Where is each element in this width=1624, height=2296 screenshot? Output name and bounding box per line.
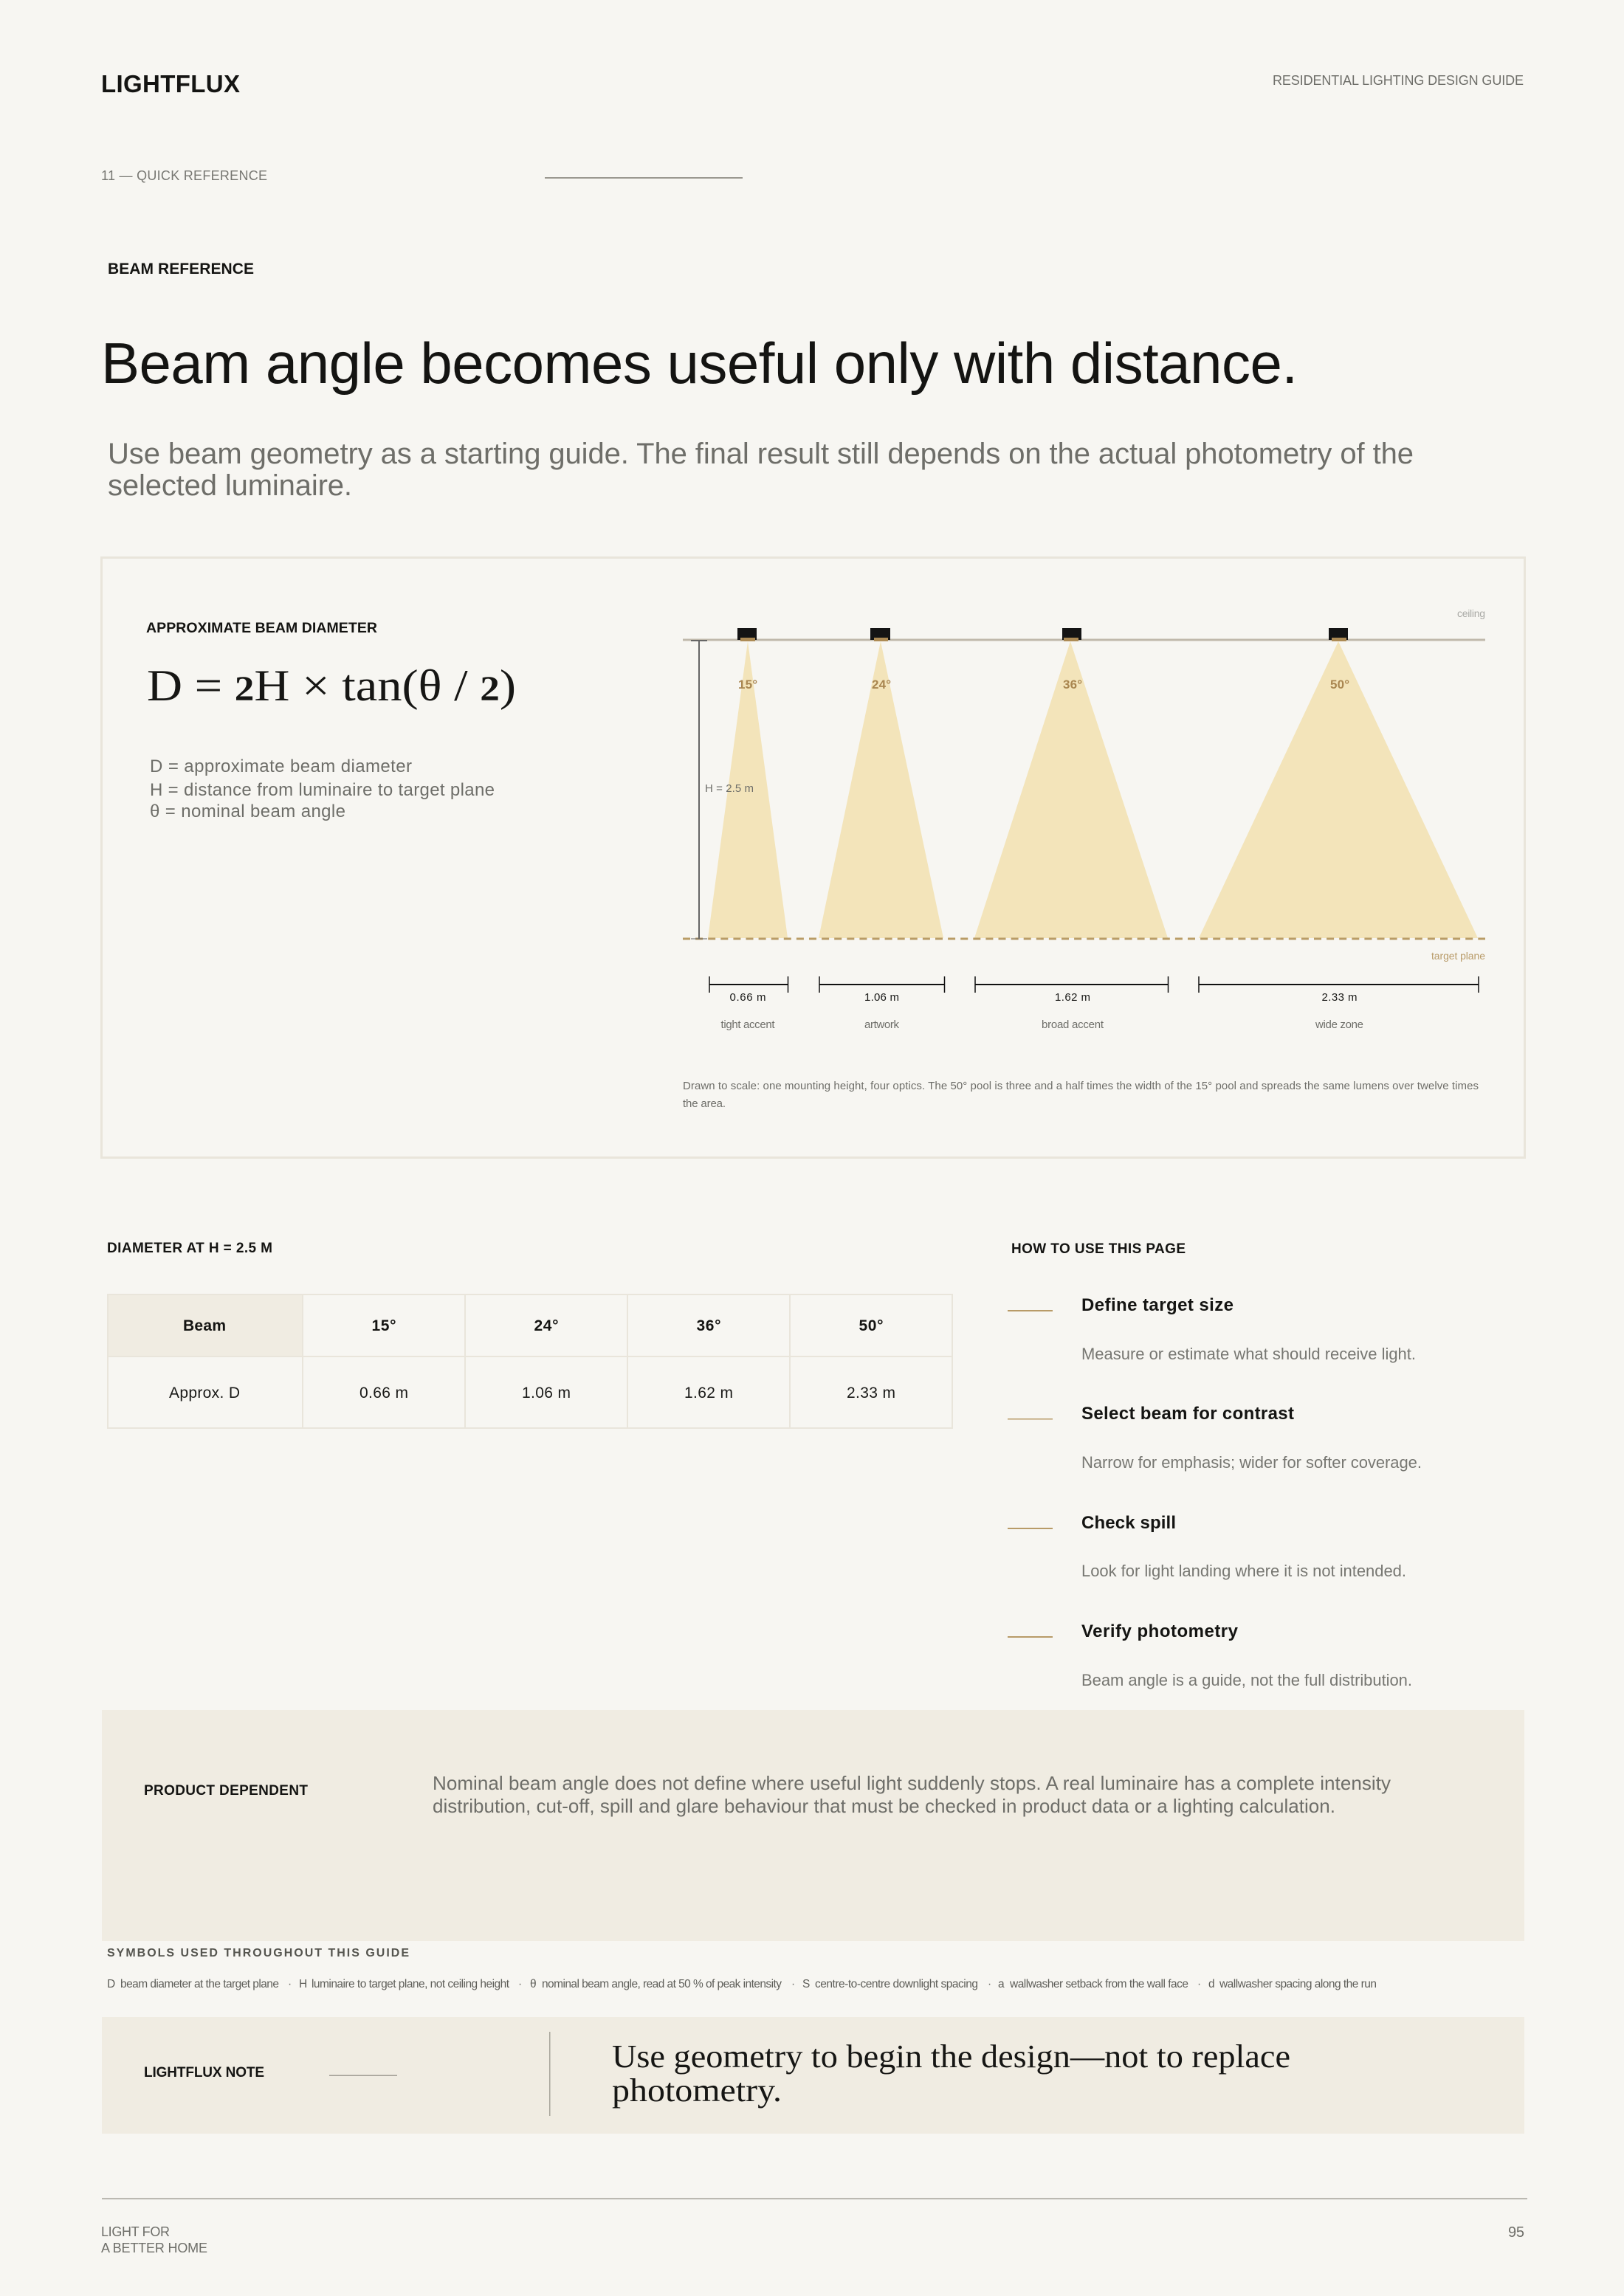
callout body: distribution, cut-off, spill and glare behaviour that must be checked in product data or a lighting calculation.: [433, 1795, 1335, 1817]
symbols list: ·: [1197, 1978, 1201, 1990]
table header row: [183, 1317, 883, 1334]
steps heading: HOW TO USE THIS PAGE: [1011, 1241, 1186, 1257]
table heading: DIAMETER AT H = 2.5 M: [107, 1241, 272, 1256]
step 4: Beam angle is a guide, not the full distribution.: [1081, 1671, 1412, 1689]
subtitle: Use beam geometry as a starting guide. The final result still depends on the actual photometry of the: [108, 438, 1414, 470]
table header row: 36°: [697, 1317, 720, 1334]
use labels: broad accent: [1042, 1018, 1104, 1031]
eyebrow: BEAM REFERENCE: [108, 261, 254, 277]
table header row: 50°: [859, 1317, 883, 1334]
beam angle labels: 36°: [1063, 678, 1082, 692]
footer tagline: LIGHT FOR: [101, 2224, 170, 2239]
table value row: 2.33 m: [847, 1385, 895, 1402]
symbols list: luminaire to target plane, not ceiling height: [312, 1978, 510, 1990]
symbols list: ·: [791, 1978, 795, 1990]
step 2: [1008, 1404, 1422, 1472]
table grid: [108, 1294, 952, 1428]
width values: [729, 991, 1357, 1004]
use labels: tight accent: [720, 1018, 775, 1031]
symbols list: [107, 1978, 1377, 1990]
table value row: 1.62 m: [684, 1385, 733, 1402]
panel: beam diameter formula and diagram: [102, 558, 1525, 1157]
step 2: Select beam for contrast: [1081, 1404, 1294, 1424]
step 2: Narrow for emphasis; wider for softer coverage.: [1081, 1453, 1422, 1472]
panel: how to use this page: [1008, 1241, 1422, 1689]
symbols list: wallwasher setback from the wall face: [1009, 1978, 1188, 1990]
symbols list: θ: [530, 1978, 537, 1990]
table value row: Approx. D: [169, 1385, 240, 1402]
step 4: Verify photometry: [1081, 1621, 1239, 1641]
ceiling label: ceiling: [1457, 607, 1485, 619]
title: Beam angle becomes useful only with distance.: [101, 331, 1298, 396]
table header cell background: [108, 1294, 303, 1356]
formula legend: H = distance from luminaire to target plane: [150, 780, 495, 800]
diagram caption: Drawn to scale: one mounting height, four optics. The 50° pool is three and a half times the width of the 15° pool and spreads the same lumens over twelve times: [683, 1080, 1479, 1092]
table header row: Beam: [183, 1317, 226, 1334]
width values: 1.06 m: [864, 991, 899, 1004]
note quote: photometry.: [612, 2072, 782, 2109]
symbols list: ·: [988, 1978, 991, 1990]
table value row: 1.06 m: [522, 1385, 571, 1402]
note quote: [612, 2038, 1290, 2109]
footer tagline: [101, 2224, 207, 2255]
height dimension: H = 2.5 m: [705, 782, 754, 795]
formula legend: D = approximate beam diameter: [150, 756, 412, 776]
formula legend: [150, 756, 495, 821]
beam angle labels: 50°: [1330, 678, 1349, 692]
note quote: Use geometry to begin the design—not to replace: [612, 2038, 1290, 2075]
table header row: 24°: [534, 1317, 558, 1334]
symbols list: H: [299, 1978, 307, 1990]
symbols list: S: [802, 1978, 810, 1990]
width values: 0.66 m: [729, 991, 766, 1004]
symbols list: beam diameter at the target plane: [120, 1978, 279, 1990]
footer: [101, 2198, 1527, 2255]
footer tagline: A BETTER HOME: [101, 2241, 207, 2255]
table value row: [169, 1385, 895, 1402]
page number: 95: [1508, 2224, 1524, 2241]
formula: D = 2H × tan(θ / 2): [147, 661, 516, 710]
table header row: 15°: [372, 1317, 396, 1334]
symbols list: ·: [288, 1978, 292, 1990]
beam angle labels: [738, 678, 1349, 692]
step 1: [1008, 1295, 1416, 1363]
note label: LIGHTFLUX NOTE: [144, 2065, 264, 2080]
step 3: [1008, 1513, 1406, 1580]
guide title: RESIDENTIAL LIGHTING DESIGN GUIDE: [1273, 73, 1524, 88]
diagram caption: the area.: [683, 1097, 726, 1110]
target plane label: target plane: [1431, 950, 1485, 962]
width dimension bars: [709, 976, 1479, 993]
step 3: Check spill: [1081, 1513, 1176, 1533]
diagram caption: [683, 1080, 1479, 1110]
symbols list: nominal beam angle, read at 50 % of peak intensity: [542, 1978, 782, 1990]
beam angle labels: 24°: [872, 678, 891, 692]
subtitle: [108, 438, 1414, 502]
step 1: Define target size: [1081, 1295, 1234, 1315]
target plane line: [683, 937, 1485, 940]
step 3: Look for light landing where it is not intended.: [1081, 1562, 1406, 1580]
symbols heading: SYMBOLS USED THROUGHOUT THIS GUIDE: [107, 1947, 409, 1959]
formula label: APPROXIMATE BEAM DIAMETER: [146, 620, 377, 636]
step 1: Measure or estimate what should receive light.: [1081, 1345, 1416, 1363]
luminaires: [737, 628, 1348, 641]
use labels: wide zone: [1315, 1018, 1363, 1031]
callout label: PRODUCT DEPENDENT: [144, 1783, 308, 1799]
symbols legend: [107, 1947, 1377, 1990]
formula legend: θ = nominal beam angle: [150, 801, 345, 821]
symbols list: centre-to-centre downlight spacing: [815, 1978, 978, 1990]
step 4: [1008, 1621, 1412, 1689]
symbols list: D: [107, 1978, 115, 1990]
width values: 1.62 m: [1055, 991, 1090, 1004]
beam cones: [708, 641, 1478, 938]
panel: product dependent callout: [102, 1710, 1524, 1941]
use labels: [720, 1018, 1363, 1031]
header: [101, 70, 1524, 97]
callout body: Nominal beam angle does not define where useful light suddenly stops. A real luminaire has a complete intensity: [433, 1772, 1391, 1794]
width values: 2.33 m: [1321, 991, 1357, 1004]
panel: lightflux note: [102, 2017, 1524, 2134]
table value row: 0.66 m: [359, 1385, 408, 1402]
symbols list: wallwasher spacing along the run: [1219, 1978, 1377, 1990]
ceiling line: [683, 639, 1485, 641]
brand logotype: LIGHTFLUX: [101, 70, 240, 97]
panel: diameter table: [107, 1241, 952, 1428]
subtitle: selected luminaire.: [108, 469, 352, 502]
beam angle labels: 15°: [738, 678, 757, 692]
diagram: beam cones to scale: [683, 607, 1485, 1110]
symbols list: ·: [518, 1978, 522, 1990]
callout body: [433, 1772, 1391, 1817]
symbols list: d: [1208, 1978, 1215, 1990]
section label: 11 — QUICK REFERENCE: [101, 168, 267, 183]
use labels: artwork: [864, 1018, 899, 1031]
symbols list: a: [998, 1978, 1005, 1990]
